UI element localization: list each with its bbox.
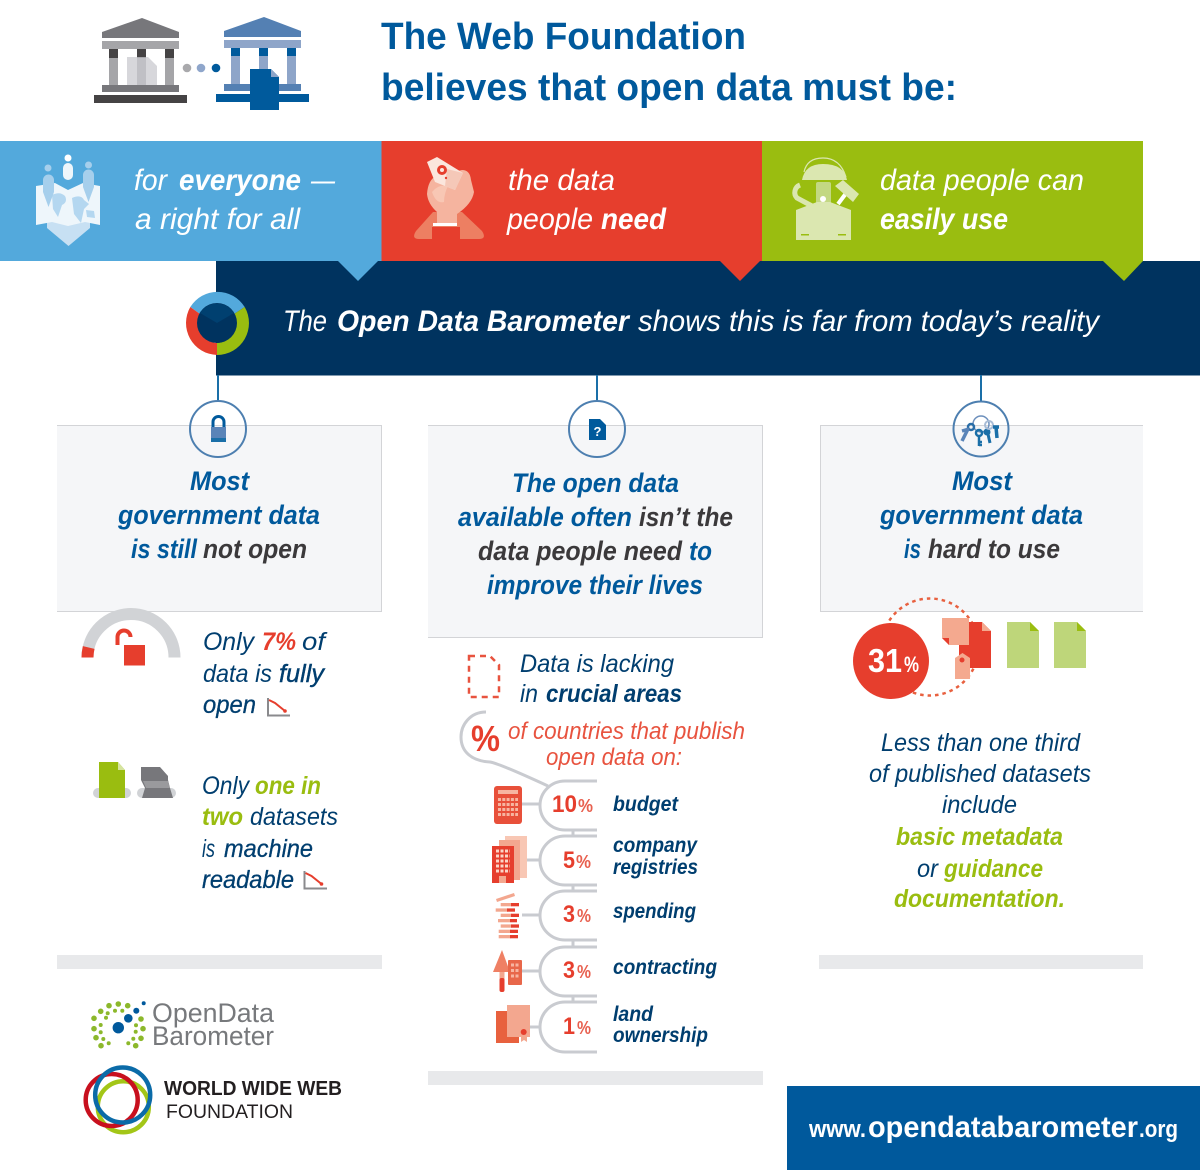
text: only 7% of data is fully open: fully — [279, 660, 326, 688]
logo: World Wide Web Foundation — [86, 1068, 342, 1132]
heading: hard to use — [928, 534, 1060, 564]
text: data is lacking in crucial areas — [520, 650, 682, 708]
list row: spending 3%: spending — [613, 900, 696, 923]
panel footer bar: right — [819, 955, 1143, 969]
icon: toolbox and helmet — [795, 158, 859, 240]
list row: budget 10%: % — [578, 796, 593, 816]
text: only one in two datasets is machine readable: one in — [255, 772, 321, 800]
percent callout — [461, 712, 745, 786]
website banner: opendatabarometer — [868, 1111, 1138, 1144]
heading: to — [689, 536, 712, 566]
text: the data people need — [506, 164, 667, 236]
list row: spending 3%: % — [577, 906, 591, 926]
text: less than one third of published datasets: basic metadata — [896, 823, 1063, 851]
website banner: .org — [1139, 1116, 1178, 1143]
text: only 7% of data is fully open: of — [302, 628, 328, 656]
text: only 7% of data is fully open: Only — [203, 628, 255, 656]
text: the data people need: the data — [508, 164, 615, 197]
text: the data people need: need — [601, 203, 667, 236]
logo: Open Data Barometer: Barometer — [152, 1021, 274, 1051]
heading: government data — [117, 500, 320, 530]
text: for everyone: — — [310, 164, 336, 197]
text: data people can easily use: data people can — [880, 164, 1084, 197]
navy banner: Open Data Barometer — [216, 261, 1200, 376]
text: only one in two datasets is machine readable: two — [202, 803, 243, 831]
panel: most government data is still not open — [57, 375, 382, 612]
graphic: 31% of datasets: % — [904, 652, 919, 677]
list row: spending 3% — [496, 891, 696, 947]
text: only 7% of data is fully open: data is — [203, 660, 272, 688]
website banner: www. — [808, 1116, 866, 1143]
panel: open data available isn't what people need — [428, 375, 763, 638]
text: less than one third of published datasets: Less than one third — [881, 729, 1081, 757]
text: data people can easily use — [880, 164, 1084, 236]
logo: World Wide Web Foundation: FOUNDATION — [166, 1102, 293, 1123]
text: only one in two datasets is machine readable — [202, 772, 338, 894]
text: the data people need: people — [506, 203, 593, 236]
connector and question document icon — [569, 375, 625, 457]
text: less than one third of published datasets: of published datasets — [869, 760, 1091, 788]
icon: people on world map — [36, 154, 100, 246]
list row: company registries 5%: % — [576, 852, 591, 872]
logo: World Wide Web Foundation: WORLD WIDE WEB — [164, 1078, 342, 1100]
text: for everyone: for — [134, 164, 168, 197]
list row: land ownership 1% — [496, 1002, 708, 1052]
graphic: 31% of datasets: 31 — [868, 642, 902, 679]
text: only 7% of data is fully open — [203, 628, 328, 719]
panel footer bar: left — [57, 955, 382, 969]
heading: isn’t the — [639, 502, 733, 532]
icon: falling chart — [268, 698, 290, 716]
heading — [458, 468, 733, 600]
connector and lock icon — [190, 375, 246, 457]
text: less than one third of published datasets: or — [917, 855, 940, 883]
text: only one in two datasets is machine readable: Only — [202, 772, 250, 800]
text: data is lacking in crucial areas: crucial areas — [546, 680, 682, 708]
text: only one in two datasets is machine readable: readable — [202, 866, 294, 894]
icon: barometer donut — [186, 292, 249, 355]
list row: budget 10% — [494, 781, 679, 836]
text: data is lacking in crucial areas: Data is lacking — [520, 650, 674, 678]
list row: land ownership 1%: land — [613, 1003, 654, 1026]
navy banner: Open Data Barometer: shows this is far from today’s reality — [638, 305, 1101, 338]
list row: contracting 3%: % — [577, 962, 591, 982]
icon: contract arrow and building — [493, 950, 522, 992]
connector and question document icon: ? — [594, 424, 602, 439]
icon: documents with metadata — [942, 618, 991, 679]
icon: stack of coins — [496, 893, 519, 938]
text: only one in two datasets is machine readable: machine — [224, 835, 313, 863]
navy banner: Open Data Barometer: The — [283, 305, 327, 338]
text: less than one third of published datasets: include — [942, 791, 1017, 819]
heading: improve their lives — [487, 570, 703, 600]
list row: company registries 5%: company — [613, 834, 698, 857]
panel: data people can easily use — [762, 141, 1143, 281]
icon: hand holding data tag — [414, 157, 484, 239]
text: only one in two datasets is machine readable: is — [202, 835, 215, 863]
list row: spending 3%: 3 — [563, 901, 575, 928]
list row: company registries 5%: 5 — [563, 847, 575, 874]
heading: government data — [879, 500, 1083, 530]
heading: Most — [190, 466, 250, 496]
heading: is still — [131, 534, 197, 564]
list row: budget 10%: budget — [613, 793, 679, 816]
heading — [117, 466, 320, 564]
percent callout: open data on: — [546, 744, 682, 771]
heading: not open — [203, 534, 307, 564]
list row: land ownership 1%: % — [577, 1018, 591, 1038]
icon: closed and open government buildings — [94, 17, 309, 110]
panel: for everyone — [0, 141, 382, 281]
text: less than one third of published datasets: guidance — [943, 855, 1043, 883]
heading: The open data — [512, 468, 679, 498]
percent callout: of countries that publish — [508, 718, 745, 745]
text: only 7% of data is fully open: 7% — [262, 628, 296, 656]
text: for everyone: a right for all — [135, 203, 301, 236]
website banner — [787, 1086, 1200, 1170]
icon: calculator — [494, 786, 522, 824]
panel: the data people need — [382, 141, 762, 281]
title — [381, 16, 957, 109]
logo: Open Data Barometer: OpenData — [152, 998, 275, 1028]
icon: open and closed documents — [93, 762, 176, 798]
text: less than one third of published datasets — [869, 729, 1091, 913]
list row: budget 10%: 10 — [552, 791, 577, 818]
heading: available often — [458, 502, 632, 532]
heading: data people need — [478, 536, 682, 566]
list row: company registries 5% — [492, 834, 698, 891]
list row: land ownership 1%: ownership — [613, 1024, 708, 1047]
heading: Most — [952, 466, 1013, 496]
text: for everyone: everyone — [179, 164, 301, 197]
title: The Web Foundation — [381, 16, 746, 58]
list row: company registries 5%: registries — [613, 856, 698, 879]
text: less than one third of published datasets: documentation. — [894, 885, 1065, 913]
icon: land certificate — [496, 1005, 530, 1043]
graphic: 31% of datasets — [853, 598, 1086, 699]
icon: falling chart — [304, 871, 327, 888]
text: for everyone — [134, 164, 336, 236]
list row: land ownership 1%: 1 — [563, 1013, 575, 1040]
logo: Open Data Barometer — [91, 998, 275, 1051]
icon: green documents — [1007, 622, 1086, 668]
list row: contracting 3% — [493, 947, 717, 1002]
panel footer bar: middle — [428, 1071, 763, 1085]
heading — [879, 466, 1083, 564]
icon: office building — [492, 836, 527, 883]
text: data people can easily use: easily use — [880, 203, 1008, 236]
list row: contracting 3%: 3 — [563, 957, 575, 984]
navy banner: Open Data Barometer: Open Data Barometer — [337, 305, 631, 338]
percent callout: % — [471, 718, 500, 759]
text: only one in two datasets is machine readable: datasets — [250, 803, 338, 831]
text: only 7% of data is fully open: open — [203, 691, 256, 719]
icon: gauge with open padlock — [88, 614, 174, 666]
title: believes that open data must be: — [381, 67, 957, 109]
heading: is — [904, 534, 921, 564]
icon: dashed missing document — [469, 656, 499, 697]
panel: most government data is hard to use — [820, 375, 1143, 612]
list row: contracting 3%: contracting — [613, 956, 717, 979]
text: data is lacking in crucial areas: in — [520, 680, 538, 708]
connector and keys icon — [954, 375, 1008, 456]
